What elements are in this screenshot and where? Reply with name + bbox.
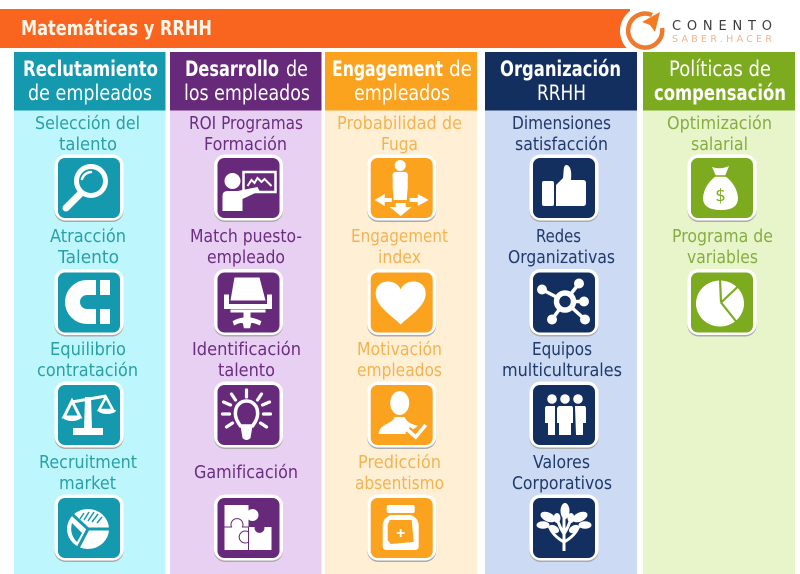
- icon: office chair: [214, 269, 283, 336]
- label: Match puesto-empleado: [190, 226, 302, 268]
- header: Engagement: de: [449, 57, 472, 81]
- label: ROI Programas Formación: Formación: [204, 134, 287, 155]
- label: Redes Organizativas: [508, 226, 615, 268]
- header: Organización: RRHH: [537, 81, 586, 105]
- header: Engagement: empleados: [354, 81, 450, 105]
- icon: money bag: [688, 154, 756, 222]
- label: Dimensiones satisfacción: Dimensiones: [512, 113, 611, 134]
- label: Valores Corporativos: [512, 452, 612, 494]
- label: Equipos multiculturales: multiculturales: [502, 360, 622, 381]
- logo: Conento: [620, 0, 800, 56]
- logo: Conento: CONENTO: [672, 19, 772, 34]
- header: Desarrollo: de: [286, 57, 308, 81]
- label: Recruitment market: Recruitment: [39, 452, 137, 473]
- label: Identificación talento: [192, 339, 301, 381]
- label: Dimensiones satisfacción: [512, 113, 611, 155]
- label: Gamificación: Gamificación: [194, 462, 298, 483]
- label: Motivación empleados: [357, 339, 442, 381]
- label: Predicción absentismo: Predicción: [358, 452, 441, 473]
- panel: Organización RRHH: [485, 52, 637, 574]
- header: Organización: [485, 52, 637, 110]
- icon: segmented pie: [54, 494, 124, 562]
- header: Políticas: [643, 52, 795, 110]
- icon: person with check: [367, 382, 436, 449]
- label: Valores Corporativos: Valores: [533, 452, 590, 473]
- label: ROI Programas Formación: ROI Programas: [189, 113, 303, 134]
- label: Equilibrio contratación: Equilibrio: [50, 339, 126, 360]
- label: ROI Programas Formación: [189, 113, 303, 155]
- label: Probabilidad de Fuga: Fuga: [381, 134, 418, 155]
- label: Programa de variables: variables: [687, 247, 758, 268]
- label: Motivación empleados: Motivación: [357, 339, 442, 360]
- label: Selección del talento: talento: [59, 134, 117, 155]
- label: Equilibrio contratación: contratación: [37, 360, 138, 381]
- header: Organización: Organización: [500, 57, 621, 81]
- icon: light bulb: [214, 382, 283, 449]
- label: Engagement index: Engagement: [351, 226, 448, 247]
- icon: thumbs up: [530, 154, 598, 222]
- label: Recruitment market: market: [59, 473, 116, 494]
- label: Programa de variables: Programa de: [672, 226, 773, 247]
- label: Identificación talento: Identificación: [192, 339, 301, 360]
- header: Desarrollo: los empleados: [184, 81, 310, 105]
- label: Engagement index: index: [378, 247, 421, 268]
- header: Políticas: Políticas de: [669, 57, 771, 81]
- label: Engagement index: [351, 226, 448, 268]
- icon: medicine jar: [367, 494, 436, 562]
- label: Dimensiones satisfacción: satisfacción: [515, 134, 608, 155]
- label: Atracción Talento: [50, 226, 126, 268]
- icon: person with arrows: [367, 154, 436, 222]
- icon: presenter at board: [214, 154, 283, 222]
- icon: plant: [530, 494, 598, 562]
- logo: Conento: SABER.HACER: [672, 34, 772, 45]
- label: Match puesto-empleado: Match puesto-: [190, 226, 302, 247]
- label: Programa de variables: [672, 226, 773, 268]
- label: Selección del talento: [35, 113, 140, 155]
- title bar: [0, 9, 640, 48]
- panel: Desarrollo de los empleados: [170, 52, 322, 574]
- label: Motivación empleados: empleados: [357, 360, 442, 381]
- icon: heart: [367, 269, 436, 336]
- icon: pie chart: [688, 269, 756, 336]
- title bar: Matemáticas y RRHH: [21, 16, 212, 40]
- label: Valores Corporativos: Corporativos: [512, 473, 612, 494]
- label: Identificación talento: talento: [218, 360, 275, 381]
- icon: magnet: [54, 269, 124, 336]
- label: Equipos multiculturales: Equipos: [532, 339, 592, 360]
- icon: network: [530, 269, 598, 336]
- label: Predicción absentismo: [355, 452, 444, 494]
- panel: Reclutamiento de empleados: [14, 52, 166, 574]
- label: Equipos multiculturales: [502, 339, 622, 381]
- panel: Políticas de compensación: [643, 52, 795, 574]
- label: Probabilidad de Fuga: [337, 113, 462, 155]
- label: Atracción Talento: Atracción: [50, 226, 126, 247]
- icon: team of three: [530, 382, 598, 449]
- panel: Engagement de empleados: [325, 52, 477, 574]
- label: Atracción Talento: Talento: [57, 247, 119, 268]
- icon: puzzle pieces: [214, 494, 283, 562]
- label: Optimización salarial: Optimización: [667, 113, 772, 134]
- header: Reclutamiento: [14, 52, 166, 110]
- label: Optimización salarial: [667, 113, 772, 155]
- label: Optimización salarial: salarial: [691, 134, 748, 155]
- icon: balance scale: [54, 382, 124, 449]
- label: Redes Organizativas: Redes: [536, 226, 581, 247]
- icon: magnifying glass: [54, 154, 124, 222]
- label: Predicción absentismo: absentismo: [355, 473, 444, 494]
- header: Reclutamiento: de empleados: [28, 81, 152, 105]
- label: Match puesto-empleado: empleado: [207, 247, 285, 268]
- label: Redes Organizativas: Organizativas: [508, 247, 615, 268]
- header: Reclutamiento: Reclutamiento: [23, 57, 158, 81]
- header: Engagement: [325, 52, 477, 110]
- header: Desarrollo: [170, 52, 322, 110]
- header: Engagement: Engagement: [332, 57, 443, 81]
- label: Equilibrio contratación: [37, 339, 138, 381]
- header: Desarrollo: Desarrollo: [185, 57, 279, 81]
- label: Probabilidad de Fuga: Probabilidad de: [337, 113, 462, 134]
- label: Selección del talento: Selección del: [35, 113, 140, 134]
- icon: money bag: $: [715, 186, 726, 206]
- label: Recruitment market: [39, 452, 137, 494]
